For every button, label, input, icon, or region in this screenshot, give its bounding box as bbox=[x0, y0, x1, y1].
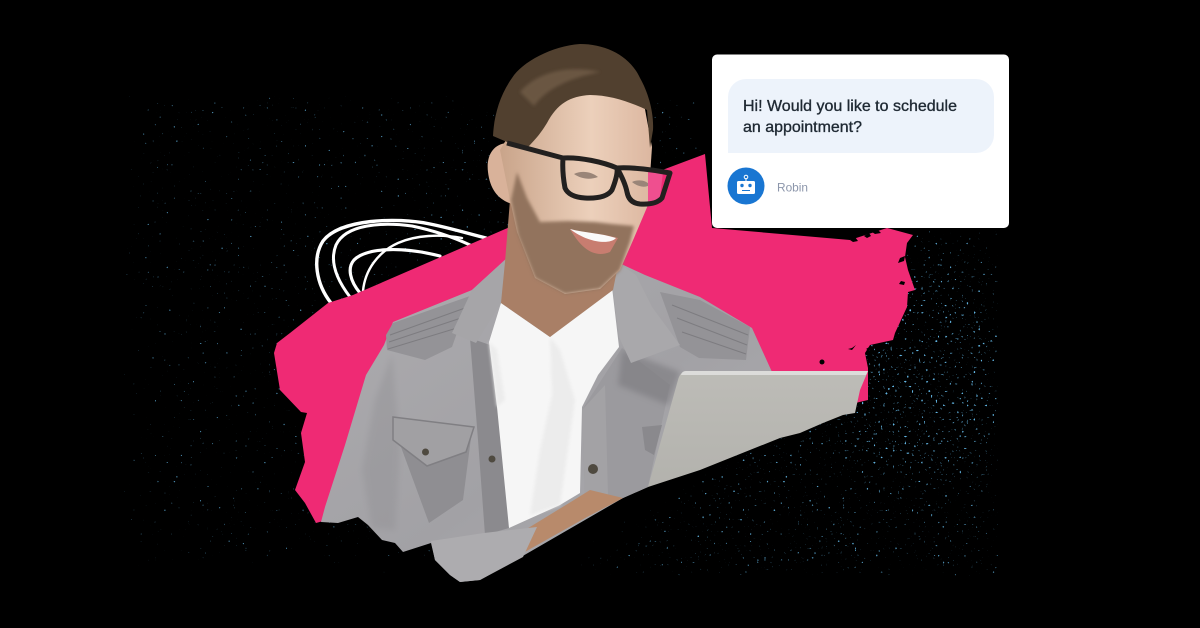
left yoke bbox=[386, 296, 470, 360]
beard bbox=[511, 172, 634, 294]
hair bbox=[493, 44, 653, 148]
right collar bbox=[613, 262, 680, 363]
buttons bbox=[422, 347, 636, 474]
bot name: Robin bbox=[777, 180, 808, 194]
message bubble bbox=[728, 79, 994, 153]
glasses bbox=[507, 143, 670, 204]
hand bbox=[523, 490, 623, 553]
white t-shirt bbox=[489, 287, 619, 528]
left chest pocket bbox=[393, 417, 474, 523]
right yoke bbox=[660, 292, 750, 360]
hair highlight bbox=[520, 69, 600, 106]
shirt fold shading bbox=[489, 337, 575, 515]
white scribble bbox=[317, 220, 486, 303]
dark inner placket bbox=[470, 338, 509, 535]
jacket shadow under laptop bbox=[582, 348, 670, 498]
message text bbox=[743, 98, 957, 136]
person bbox=[321, 44, 868, 582]
message text: an appointment? bbox=[743, 119, 862, 136]
message text: Hi! Would you like to schedule bbox=[743, 98, 957, 115]
neck bbox=[501, 200, 620, 337]
cuff bbox=[431, 527, 537, 582]
icon: robot avatar bbox=[728, 168, 764, 204]
chat card bbox=[712, 54, 1009, 228]
jacket bbox=[321, 258, 772, 582]
ear bbox=[488, 143, 522, 204]
right placket bbox=[582, 385, 608, 495]
speckle texture bbox=[120, 80, 1020, 590]
left sleeve shading bbox=[362, 355, 400, 530]
pink brush stroke bbox=[274, 154, 915, 523]
eyes bbox=[574, 172, 650, 187]
pink edge nicks bbox=[820, 230, 905, 364]
shoulder shadow bbox=[618, 350, 680, 405]
mouth bbox=[570, 229, 618, 254]
laptop bbox=[648, 371, 868, 487]
left collar bbox=[452, 258, 510, 343]
face bbox=[500, 85, 652, 294]
right chest pocket bbox=[642, 425, 662, 455]
